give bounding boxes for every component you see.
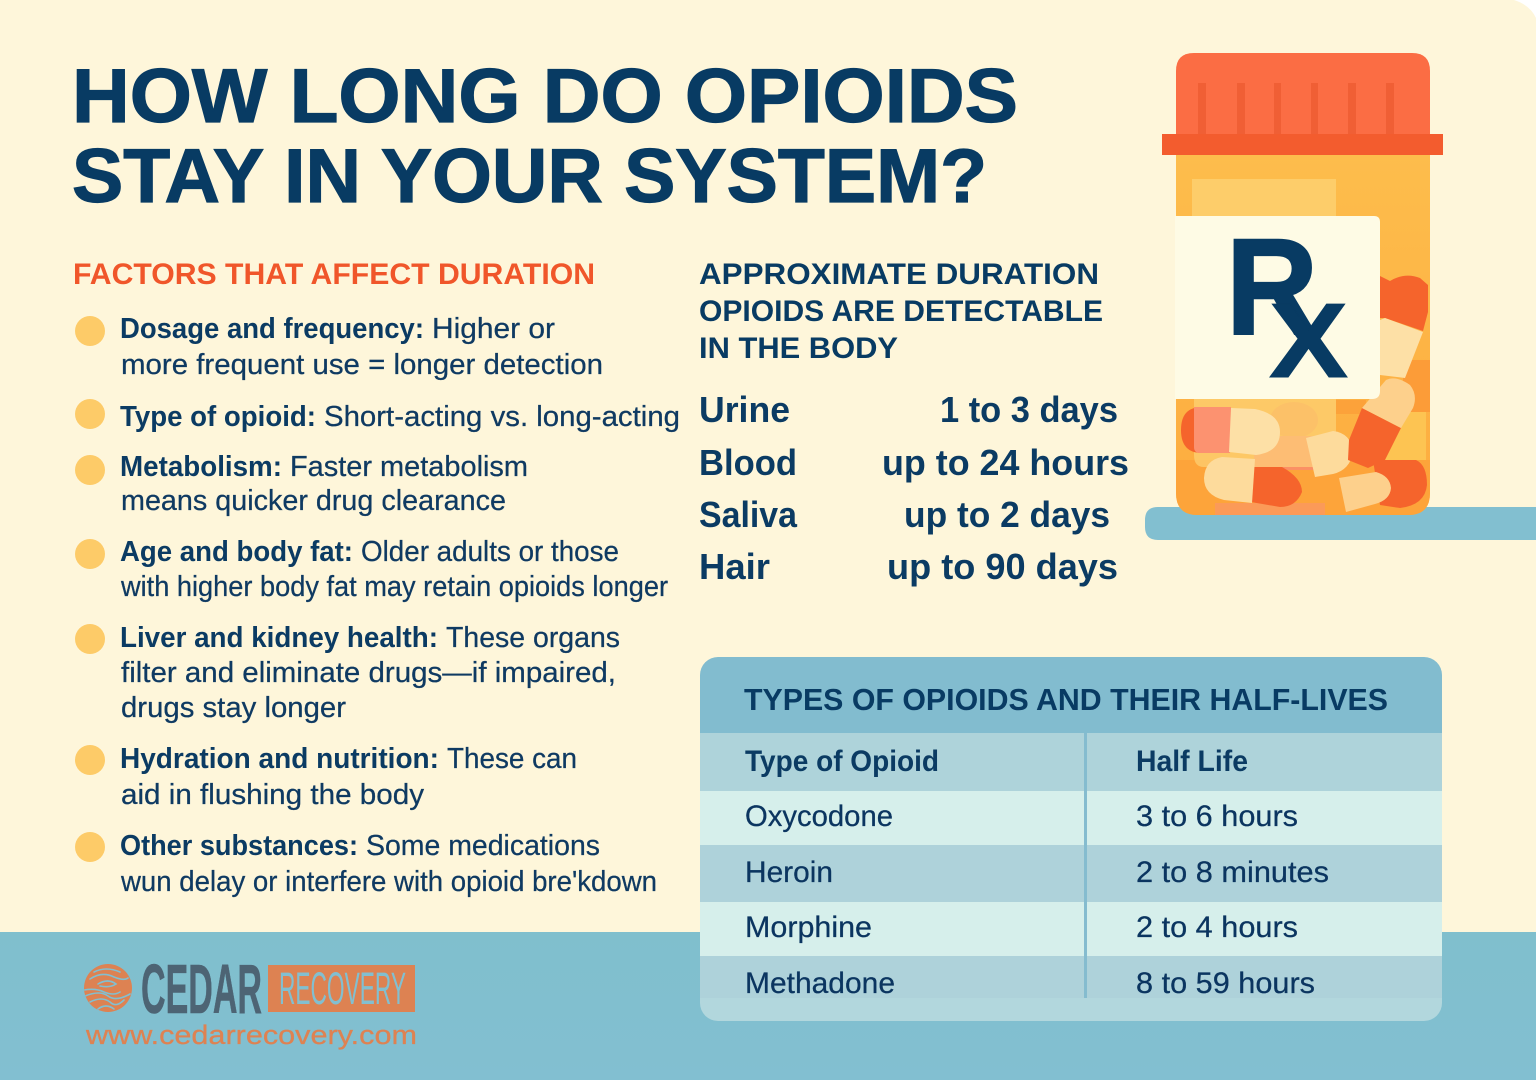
factor: other substances: Other substances:	[120, 830, 358, 862]
row: saliva: up to 2 days	[904, 494, 1110, 535]
title	[72, 54, 1018, 219]
factor: other substances	[75, 830, 657, 898]
row: blood	[699, 442, 1129, 483]
title: STAY IN YOUR SYSTEM?	[72, 134, 987, 219]
logo: Cedar Recovery	[84, 964, 416, 1050]
factor: dosage and frequency: more frequent use = longer detection	[121, 349, 603, 381]
row: saliva	[699, 494, 1110, 535]
cap	[1176, 53, 1430, 134]
website url: www.cedarrecovery.com	[85, 1020, 417, 1050]
factor: metabolism: Faster metabolism	[290, 451, 528, 483]
row: hair: up to 90 days	[887, 546, 1118, 587]
row: urine	[699, 389, 1118, 430]
heading: approximate duration: IN THE BODY	[699, 332, 898, 365]
RECOVERY badge: RECOVERY	[279, 963, 406, 1014]
Rx symbol: R	[1226, 211, 1318, 364]
capsule lower right	[1373, 460, 1427, 508]
row: saliva: Saliva	[699, 494, 798, 535]
cap ridges	[1198, 83, 1394, 135]
capsule lower center	[1306, 431, 1353, 477]
Rx symbol	[1226, 211, 1348, 400]
factor: metabolism: means quicker drug clearance	[121, 485, 506, 517]
logo: Cedar Recovery: CEDAR	[141, 950, 262, 1028]
pills	[1176, 179, 1430, 515]
row: hair	[699, 546, 1118, 587]
row: methadone: Methadone	[745, 967, 895, 1000]
row: oxycodone	[745, 800, 1298, 833]
factor: liver and kidney health	[75, 622, 620, 724]
icon: pill bottle on shelf	[1145, 53, 1536, 540]
pale inner label	[1192, 179, 1336, 467]
bottle body	[1176, 155, 1430, 515]
cap band	[1162, 134, 1443, 155]
factor: hydration and nutrition: Hydration and nutrition:	[120, 743, 439, 775]
row: oxycodone: 3 to 6 hours	[1136, 800, 1298, 833]
table header row: Half Life	[1136, 745, 1248, 778]
factor: age and body fat: Older adults or those	[361, 536, 619, 568]
factor: hydration and nutrition	[75, 743, 577, 811]
Rx symbol: X	[1269, 282, 1348, 400]
factor: other substances: Some medications	[366, 830, 600, 862]
row: urine: Urine	[699, 389, 790, 430]
heading: approximate duration: OPIOIDS ARE DETECTABLE	[699, 295, 1103, 328]
table header row	[745, 745, 1248, 778]
table header row: Type of Opioid	[745, 745, 939, 778]
row: heroin: Heroin	[745, 856, 833, 889]
capsule left	[1181, 407, 1231, 453]
shelf	[1145, 507, 1536, 540]
factor: type of opioid	[75, 399, 680, 433]
factor: dosage and frequency: Dosage and frequency:	[120, 313, 424, 345]
row: blood: up to 24 hours	[882, 442, 1129, 483]
factor: type of opioid: Type of opioid:	[120, 401, 316, 433]
row: methadone	[745, 967, 1315, 1000]
row: oxycodone: Oxycodone	[745, 800, 893, 833]
panel: half-lives table	[700, 657, 1442, 1021]
panel: detection durations	[699, 258, 1129, 587]
row: morphine	[745, 911, 1298, 944]
table title: TYPES OF OPIOIDS AND THEIR HALF-LIVES	[744, 682, 1388, 717]
factor: age and body fat	[75, 536, 668, 603]
factor: metabolism: Metabolism:	[120, 451, 282, 483]
factor: other substances: wun delay or interfere with opioid bre'kdown	[120, 866, 657, 898]
row: morphine: Morphine	[745, 911, 872, 944]
factor: metabolism	[75, 451, 528, 517]
factor: hydration and nutrition: aid in flushing the body	[121, 779, 425, 811]
factor: liver and kidney health: These organs	[446, 622, 620, 654]
factor: liver and kidney health: filter and eliminate drugs—if impaired,	[121, 657, 616, 689]
factor: liver and kidney health: drugs stay longer	[121, 692, 346, 724]
factor: dosage and frequency	[75, 313, 603, 381]
footer band	[0, 932, 1536, 1080]
title: HOW LONG DO OPIOIDS	[72, 54, 1018, 139]
row: heroin: 2 to 8 minutes	[1136, 856, 1329, 889]
heading: approximate duration: APPROXIMATE DURATION	[699, 258, 1099, 291]
row: urine: 1 to 3 days	[940, 389, 1118, 430]
icon: wood-grain circle	[84, 964, 132, 1012]
heading: factors: FACTORS THAT AFFECT DURATION	[73, 258, 595, 291]
factor: hydration and nutrition: These can	[447, 743, 577, 775]
factor: liver and kidney health: Liver and kidney health:	[120, 622, 438, 654]
row: blood: Blood	[699, 442, 797, 483]
factor: age and body fat: with higher body fat may retain opioids longer	[120, 571, 668, 603]
white label	[1175, 216, 1380, 399]
RECOVERY badge	[268, 963, 415, 1014]
factor: age and body fat: Age and body fat:	[120, 536, 353, 568]
panel: factors that affect duration	[73, 258, 680, 898]
capsule lower left	[1251, 467, 1302, 507]
row: heroin	[745, 856, 1329, 889]
heading: approximate duration	[699, 258, 1103, 365]
factor: type of opioid: Short-acting vs. long-acting	[324, 401, 680, 433]
row: hair: Hair	[699, 546, 770, 587]
row: methadone: 8 to 59 hours	[1136, 967, 1315, 1000]
capsule diagonal	[1348, 408, 1401, 468]
row: morphine: 2 to 4 hours	[1136, 911, 1298, 944]
factor: dosage and frequency: Higher or	[432, 313, 555, 345]
capsule upper right	[1380, 276, 1428, 331]
